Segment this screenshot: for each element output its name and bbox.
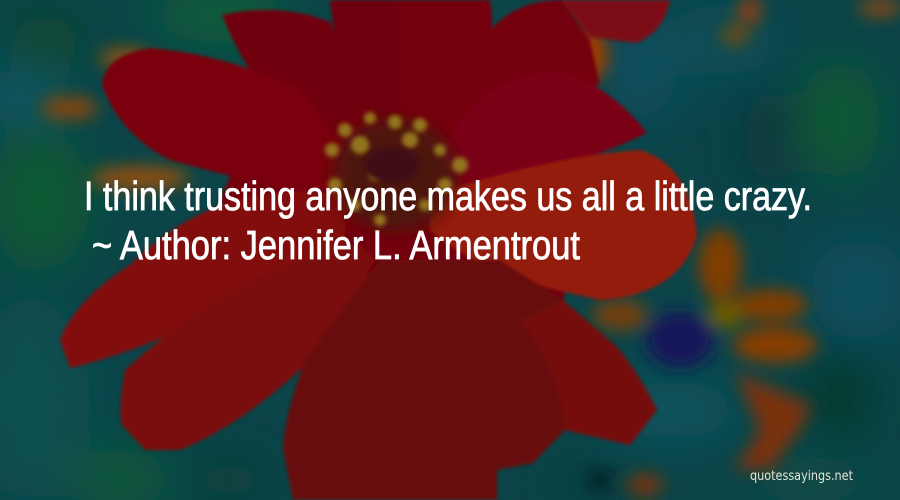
yellow flower centre bbox=[325, 112, 468, 231]
red flower petals bbox=[60, 0, 697, 500]
blurred orange background flower bbox=[588, 229, 817, 497]
author line: ~ Author: Jennifer L. Armentrout bbox=[92, 222, 581, 268]
watermark: quotessayings.net bbox=[750, 469, 853, 484]
